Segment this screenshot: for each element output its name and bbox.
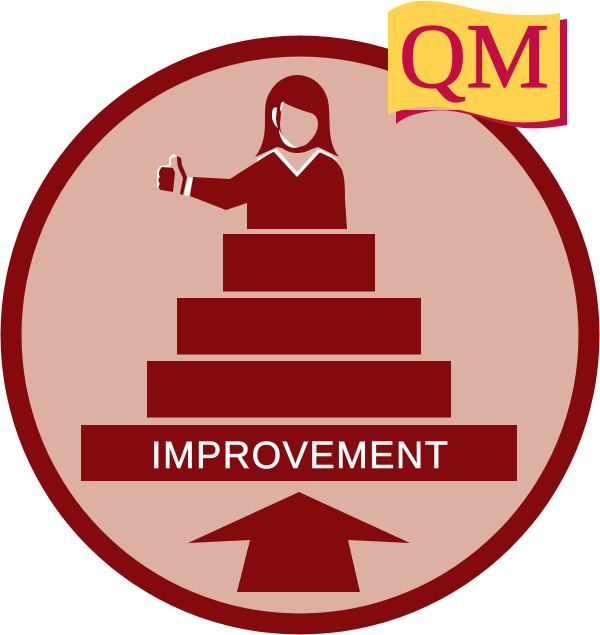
fist highlight	[157, 165, 170, 190]
hair	[255, 75, 339, 157]
shoulder highlight right	[319, 149, 338, 161]
QM letters: QM	[399, 5, 549, 107]
staircase step 1	[223, 234, 375, 292]
flag	[388, 1, 560, 122]
flag shadow	[396, 19, 567, 128]
staircase base with label: IMPROVEMENT	[151, 435, 448, 477]
face	[280, 102, 318, 147]
torso and arm	[190, 150, 347, 229]
staircase base with label	[81, 425, 517, 481]
QM flag logo	[388, 1, 567, 128]
thumb and cuff strip	[177, 156, 187, 195]
thumb highlight	[169, 154, 177, 166]
staircase step 2	[177, 298, 421, 354]
cuff	[184, 177, 193, 196]
face highlight chin	[279, 129, 299, 148]
staircase step 3	[147, 361, 451, 418]
shoulder highlight left	[257, 149, 276, 162]
hair notch highlight	[280, 101, 284, 112]
figure: person giving thumbs up	[157, 75, 347, 229]
fist	[158, 167, 175, 192]
up arrow	[188, 492, 410, 592]
collar	[274, 148, 321, 177]
face highlight left	[272, 107, 278, 128]
